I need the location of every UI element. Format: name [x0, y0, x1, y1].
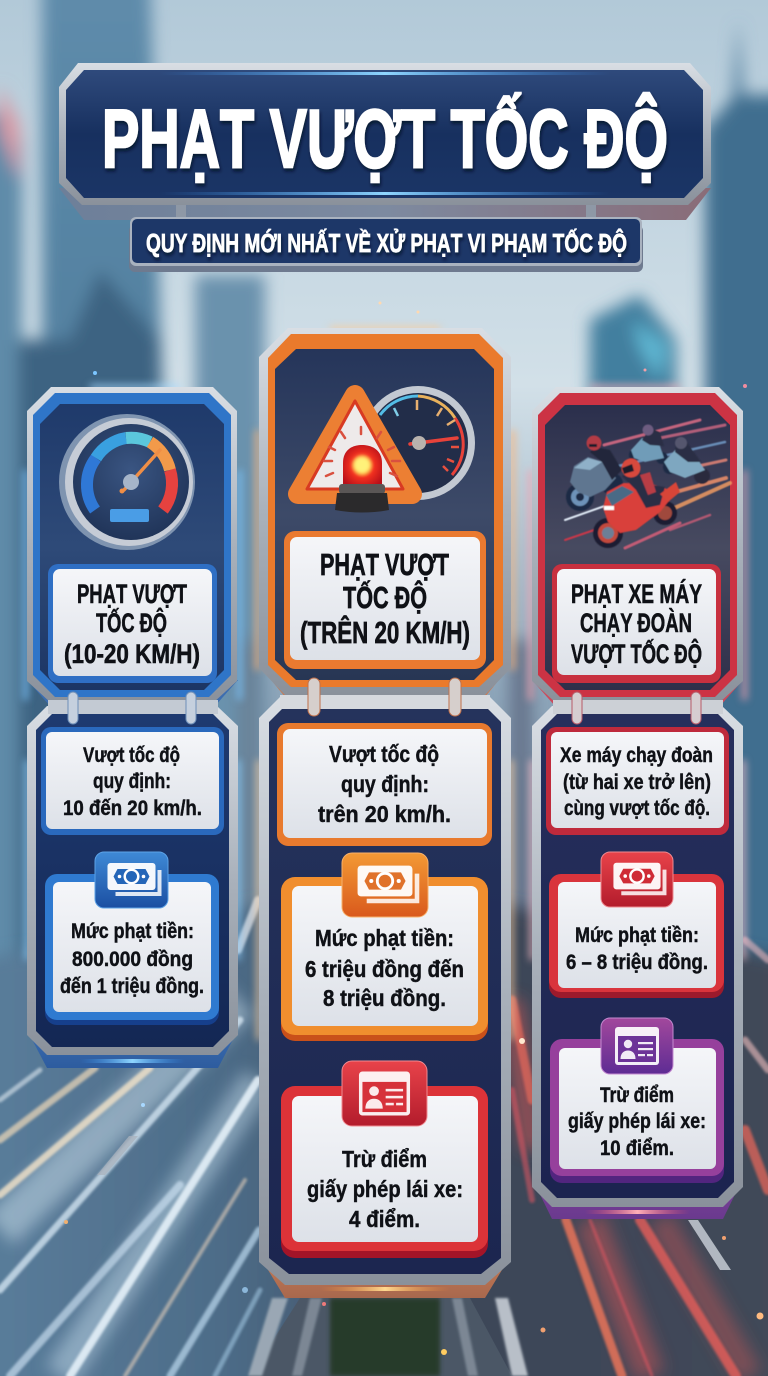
points text: [307, 1146, 463, 1232]
heading text: PHẠT XE MÁY: [571, 578, 702, 609]
info box: group riding: [546, 727, 729, 835]
lower card frame: [27, 706, 238, 1068]
info text: cùng vượt tốc độ.: [564, 797, 710, 820]
heading text: CHẠY ĐOÀN: [580, 607, 692, 638]
icon: speedometer: [59, 414, 195, 550]
heading box: [48, 564, 217, 683]
icon: motorcycle group with speed trails: [565, 420, 730, 548]
left bike: [566, 436, 623, 511]
light trails: warm streaks on the right: [238, 900, 768, 1376]
fine text: [60, 920, 204, 998]
subtitle banner: [129, 205, 643, 272]
points text: Trừ điểm: [342, 1146, 427, 1172]
info box: speed range: [277, 723, 492, 846]
fine text: Mức phạt tiền:: [575, 924, 699, 947]
light trail glow: [0, 1000, 750, 1376]
heading text: TỐC ĐỘ: [343, 579, 427, 615]
heading box: [284, 531, 486, 669]
side glows, pink: [528, 385, 747, 960]
heading text: (TRÊN 20 KM/H): [300, 614, 470, 650]
panel: left column, 10-20 km/h: [23, 385, 242, 1068]
info box: speed range: [41, 727, 224, 835]
bokeh particles: [64, 302, 764, 1355]
points text: [568, 1084, 706, 1160]
hanger rings: [280, 678, 490, 716]
icon: banknotes: [601, 852, 673, 907]
info box: licence points: [550, 1018, 724, 1183]
panel: right column, motorcycle groups: [528, 385, 747, 1219]
info text: (từ hai xe trở lên): [563, 771, 711, 794]
info text: [560, 744, 713, 820]
fine text: 6 – 8 triệu đồng.: [566, 951, 708, 974]
road median and greenery: [248, 1298, 528, 1376]
icon: banknotes: [342, 853, 428, 917]
icon: licence card: [601, 1018, 673, 1074]
heading box: [552, 564, 721, 683]
icon: warning triangle, gauge and beacon: [298, 386, 475, 512]
heading text: TỐC ĐỘ: [96, 606, 167, 638]
info box: licence points: [281, 1061, 488, 1258]
panel: center column, above 20 km/h: [255, 327, 515, 1298]
lower card frame: [259, 697, 511, 1298]
fine text: 8 triệu đồng.: [323, 985, 446, 1011]
title banner: [59, 63, 711, 220]
info text: 10 đến 20 km/h.: [63, 797, 202, 820]
hanger rings: [553, 692, 723, 724]
upper card frame: [259, 328, 511, 697]
heading text: (10-20 KM/H): [64, 639, 200, 669]
upper card frame: [27, 387, 238, 706]
heading text: [571, 578, 702, 669]
fine text: 6 triệu đồng đến: [305, 956, 464, 982]
lane markers: [97, 1136, 731, 1270]
info text: Vượt tốc độ: [83, 744, 180, 767]
hanger rings: [48, 692, 218, 724]
info text: quy định:: [341, 771, 429, 797]
fine text: Mức phạt tiền:: [71, 920, 194, 943]
info box: fine: [45, 852, 219, 1025]
heading text: PHẠT VƯỢT: [320, 547, 449, 582]
heading text: VƯỢT TỐC ĐỘ: [571, 637, 702, 669]
points text: 4 điểm.: [349, 1206, 420, 1232]
fine text: [305, 925, 464, 1011]
info text: trên 20 km/h.: [318, 801, 451, 827]
icon: licence card: [342, 1061, 427, 1126]
points text: giấy phép lái xe:: [307, 1176, 463, 1202]
info text: [318, 741, 451, 827]
info text: Xe máy chạy đoàn: [560, 744, 713, 767]
heading text: PHẠT VƯỢT: [77, 579, 187, 609]
front red bike: [593, 458, 680, 548]
points text: 10 điểm.: [600, 1137, 674, 1160]
info text: Vượt tốc độ: [329, 741, 439, 767]
fine text: 800.000 đồng: [72, 948, 193, 971]
side glows, orange: [255, 327, 515, 1040]
heading text: [300, 547, 470, 650]
side glows, blue: [23, 385, 242, 960]
upper card frame: [532, 387, 743, 706]
fine text: Mức phạt tiền:: [315, 925, 454, 951]
icon: banknotes: [95, 852, 168, 908]
rear bikes: [629, 424, 710, 484]
info box: fine: [549, 852, 724, 998]
light trails: cool streaks on the left: [0, 1020, 260, 1376]
lower card frame: [532, 706, 743, 1219]
info box: fine: [281, 853, 488, 1041]
info text: quy định:: [93, 770, 171, 793]
fine text: [566, 924, 708, 974]
heading text: [64, 579, 200, 669]
fine text: đến 1 triệu đồng.: [60, 975, 204, 998]
points text: giấy phép lái xe:: [568, 1110, 706, 1133]
points text: Trừ điểm: [600, 1084, 674, 1107]
info text: [63, 744, 202, 820]
